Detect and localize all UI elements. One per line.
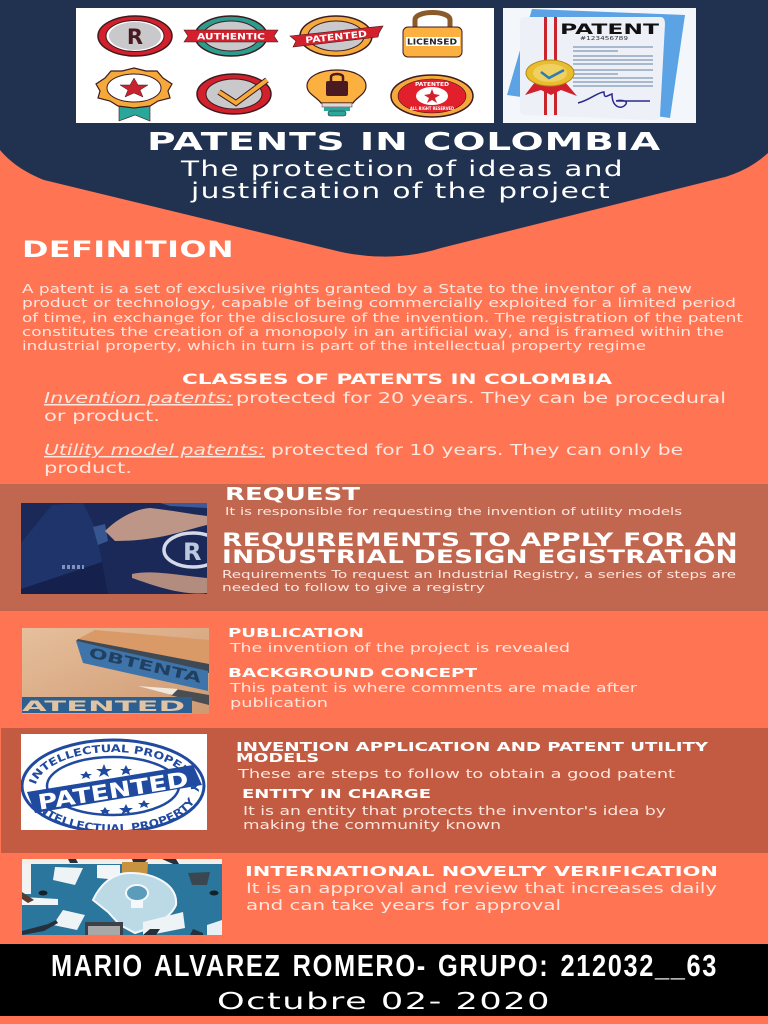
heading: definition: DEFINITION	[22, 238, 234, 263]
image: patent badges	[76, 8, 494, 123]
image: team around lightbulb head	[22, 859, 222, 935]
text block: definition: constitutes the creation of a monopoly in an artificial way, and is framed within the	[22, 324, 724, 339]
text: request description: It is responsible for requesting the invention of utility models	[225, 506, 682, 518]
subtitle	[180, 157, 624, 203]
heading: invention application: MODELS	[236, 751, 319, 765]
heading: requirements: REQUIREMENTS TO APPLY FOR AN	[222, 530, 738, 551]
text block: definition: A patent is a set of exclusive rights granted by a State to the inventor of a new	[22, 281, 692, 296]
text block: utility model patents: Utility model patents:	[44, 441, 265, 459]
text: requirements description	[222, 569, 736, 594]
image: patented seal stamp: INTELLECTUAL PROPERTY	[28, 744, 199, 792]
heading: classes of patents: CLASSES OF PATENTS IN COLOMBIA	[182, 372, 613, 388]
text: novelty description: and can take years for approval	[246, 898, 561, 914]
heading: request: REQUEST	[225, 484, 361, 505]
icon: patented seal	[391, 75, 473, 117]
image: patented seal stamp	[21, 734, 207, 830]
icon: licensed padlock: LICENSED	[407, 38, 457, 46]
footer band	[0, 944, 768, 1016]
subtitle: justification of the project	[190, 179, 611, 203]
text block: utility model patents	[44, 441, 683, 477]
text block: invention patents	[44, 389, 726, 425]
panel: publication	[22, 626, 637, 715]
icon: lock bulb	[307, 70, 366, 116]
text: steps description: These are steps to follow to obtain a good patent	[237, 767, 675, 781]
subtitle: The protection of ideas and	[180, 157, 624, 181]
heading: requirements: INDUSTRIAL DESIGN EGISTRATION	[222, 547, 738, 568]
panel: request and requirements	[0, 484, 768, 611]
image: patented seal stamp: INTELLECTUAL PROPERTY	[42, 796, 193, 830]
image: patented stamp: OBTENTA	[87, 645, 203, 687]
text block: utility model patents: product.	[44, 459, 132, 477]
text block: utility model patents: protected for 10 years. They can only be	[271, 441, 683, 459]
image: patent certificate	[503, 8, 696, 123]
panel: international novelty verification	[22, 859, 718, 935]
icon: patented seal: ALL RIGHT RESERVED	[410, 106, 455, 111]
text: background description: This patent is where comments are made after	[229, 681, 637, 695]
image: hands protecting registered mark: R	[183, 538, 201, 566]
icon: licensed padlock	[403, 12, 462, 57]
text block: definition: product or technology, capable of being commercially exploited for a limited period	[22, 295, 736, 310]
text: novelty description	[246, 881, 717, 914]
image: patent certificate: #123456789	[580, 36, 628, 42]
image: patented seal stamp: PATENTED	[36, 767, 190, 815]
text block: invention patents: protected for 20 years. They can be procedural	[236, 389, 726, 407]
text block: invention patents: or product.	[44, 407, 160, 425]
heading: novelty verification: INTERNATIONAL NOVELTY VERIFICATION	[245, 864, 718, 880]
text: entity description	[243, 804, 666, 832]
title: PATENTS IN COLOMBIA	[147, 127, 661, 156]
image: hands protecting registered mark	[21, 503, 222, 594]
icon: authentic badge	[184, 16, 278, 56]
text: entity description: It is an entity that protects the inventor's idea by	[243, 804, 666, 818]
text: background description: publication	[230, 696, 328, 710]
heading: publication: PUBLICATION	[228, 626, 364, 640]
heading: invention application: INVENTION APPLICATION AND PATENT UTILITY	[236, 740, 708, 754]
image: patent certificate: PATENT	[560, 22, 660, 38]
icon: star medal	[96, 68, 172, 121]
icon: R badge: R	[127, 25, 143, 49]
icon: check badge	[197, 74, 271, 114]
heading: background concept: BACKGROUND CONCEPT	[228, 666, 478, 680]
text: requirements description: Requirements To request an Industrial Registry, a series of steps are	[222, 569, 736, 581]
image: patented stamp	[22, 628, 209, 715]
icon: patented badge: PATENTED	[305, 30, 368, 46]
header navy banner	[0, 0, 768, 257]
date: Octubre 02- 2020	[217, 989, 551, 1015]
icon: authentic badge: AUTHENTIC	[197, 32, 265, 42]
text: background description	[229, 681, 637, 710]
text: entity description: making the community known	[243, 818, 501, 832]
icon: patented badge	[290, 16, 383, 56]
text block: invention patents: Invention patents:	[44, 389, 233, 407]
icon: R badge	[98, 16, 172, 56]
text: publication description: The invention of the project is revealed	[229, 641, 570, 655]
icon: patented seal: PATENTED	[415, 82, 449, 88]
heading: entity in charge: ENTITY IN CHARGE	[242, 787, 431, 801]
text block: definition	[22, 281, 743, 353]
image: patented stamp: ATENTED	[22, 699, 185, 715]
heading: requirements	[222, 530, 738, 568]
text block: definition: of time, in exchange for the disclosure of the invention. The registration of the patent	[22, 310, 743, 325]
text: novelty description: It is an approval and review that increases daily	[246, 881, 717, 897]
panel: invention application and entity	[1, 728, 768, 853]
text: requirements description: needed to follow to give a registry	[222, 582, 485, 594]
heading: invention application	[236, 740, 708, 765]
text block: definition: industrial property, which in turn is part of the intellectual property regime	[22, 338, 646, 353]
